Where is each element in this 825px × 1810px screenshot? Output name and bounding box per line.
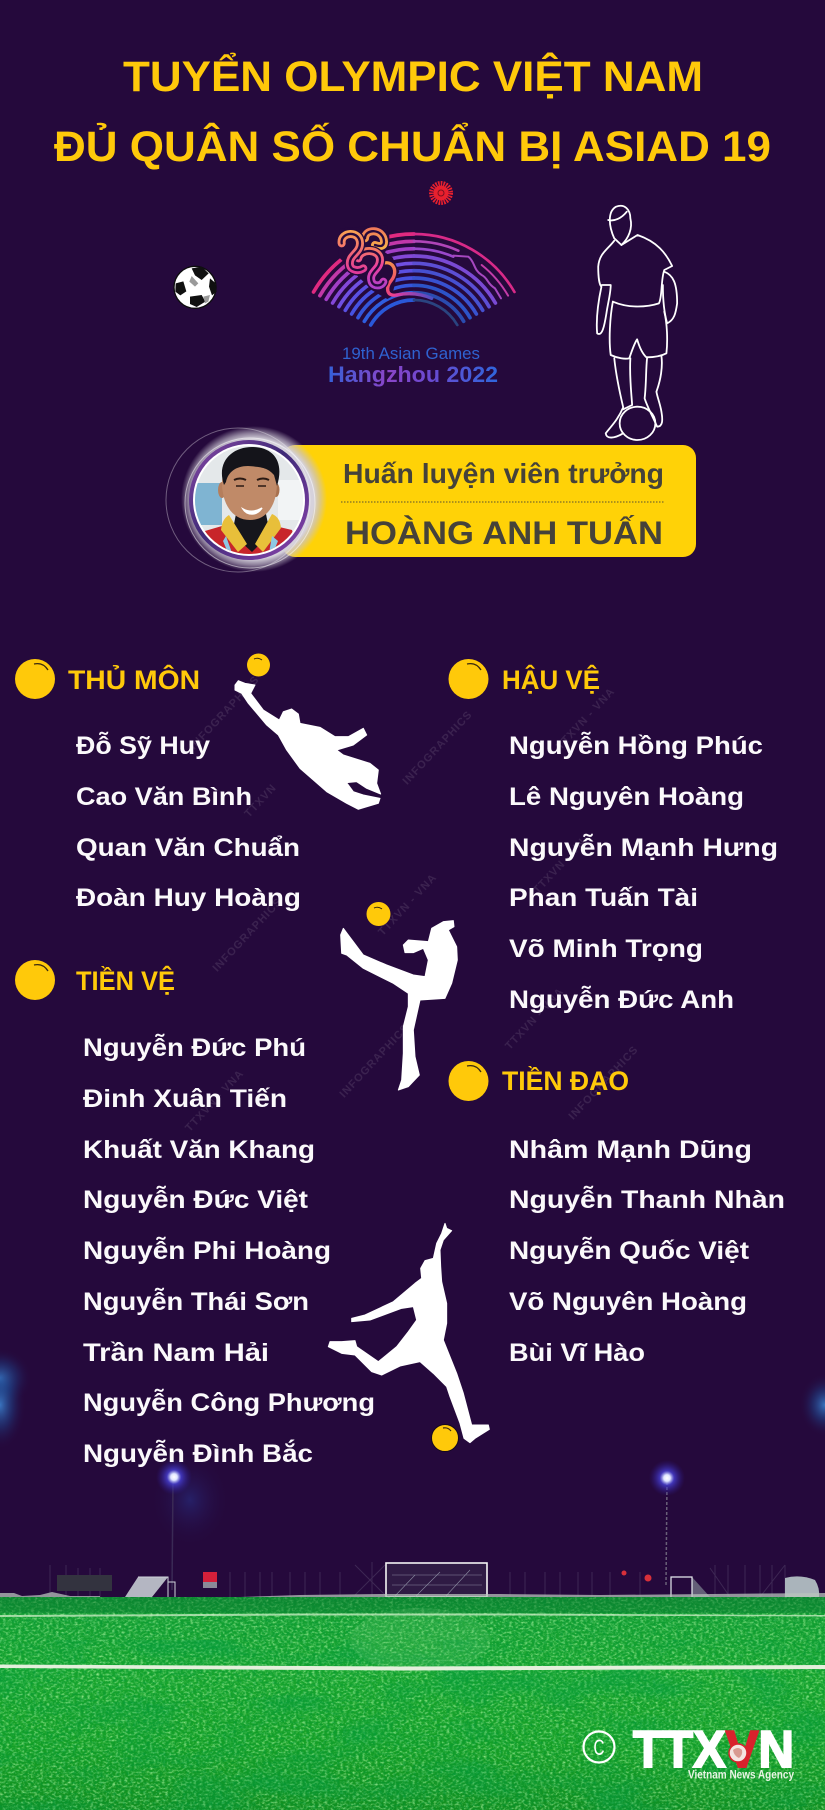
panel: defenders bbox=[448, 659, 778, 1014]
logo city: Hangzhou 2022 bbox=[328, 362, 498, 387]
squiggle emblem bbox=[338, 225, 432, 299]
yellow name plate bbox=[282, 445, 696, 557]
concentric arcs bbox=[314, 234, 514, 325]
panel: midfielders bbox=[15, 960, 375, 1468]
watermarks: INFOGRAPHICS bbox=[188, 674, 262, 752]
player list: Nguyễn Thanh Nhàn bbox=[509, 1184, 785, 1214]
icon: yellow ball bbox=[15, 960, 55, 1000]
horizon debris bbox=[0, 1592, 825, 1597]
watermarks: TTXVN - VNA bbox=[503, 986, 566, 1052]
player list: Quan Văn Chuẩn bbox=[76, 834, 300, 862]
player list: Nguyễn Thái Sơn bbox=[83, 1286, 309, 1316]
small goal right bbox=[671, 1577, 710, 1597]
small goal left bbox=[125, 1577, 175, 1597]
watermarks bbox=[183, 674, 641, 1134]
player list: Nguyễn Phi Hoàng bbox=[83, 1235, 331, 1265]
globe emblem bbox=[729, 1744, 747, 1762]
player list: Nguyễn Đức Phú bbox=[83, 1032, 306, 1062]
player list bbox=[76, 730, 301, 912]
main goal bbox=[386, 1563, 487, 1597]
watermarks: INFOGRAPHICS bbox=[567, 1044, 641, 1122]
silhouette: goalkeeper diving bbox=[235, 654, 381, 809]
heading: HẬU VỆ bbox=[502, 664, 600, 695]
icon: yellow ball bbox=[15, 659, 55, 699]
watermarks: TTXVN - VNA bbox=[554, 686, 617, 752]
floodlight left bbox=[150, 1452, 230, 1590]
player list: Khuất Văn Khang bbox=[83, 1136, 315, 1164]
panel: goalkeepers bbox=[15, 659, 301, 912]
copyright mark bbox=[584, 1732, 614, 1762]
icon: outlined player bbox=[597, 206, 677, 440]
player list: Võ Minh Trọng bbox=[509, 935, 703, 963]
icon: yellow ball bbox=[448, 1061, 488, 1101]
player list: Nguyễn Hồng Phúc bbox=[509, 730, 763, 760]
watermarks: TTXVN - VNA bbox=[531, 830, 594, 896]
watermarks: TTXVN - VNA bbox=[376, 872, 439, 938]
silhouette: high kick player bbox=[341, 902, 457, 1090]
red sign bbox=[203, 1570, 652, 1588]
field bbox=[0, 1597, 825, 1810]
player list: Nguyễn Quốc Việt bbox=[509, 1235, 750, 1265]
dugout bbox=[785, 1576, 819, 1597]
agency logo bbox=[584, 1721, 795, 1782]
title: ĐỦ QUÂN SỐ CHUẨN BỊ ASIAD 19 bbox=[54, 122, 771, 171]
player list: Bùi Vĩ Hào bbox=[509, 1339, 645, 1367]
copyright mark: C bbox=[594, 1735, 605, 1760]
player list bbox=[509, 730, 778, 1014]
title: TUYỂN OLYMPIC VIỆT NAM bbox=[123, 52, 703, 101]
corner floodlight glows bbox=[0, 1348, 825, 1450]
heading: THỦ MÔN bbox=[68, 663, 200, 695]
coach role: Huấn luyện viên trưởng bbox=[343, 458, 664, 489]
player list: Trần Nam Hải bbox=[83, 1339, 269, 1367]
player list: Phan Tuấn Tài bbox=[509, 884, 698, 912]
heading: TIỀN ĐẠO bbox=[502, 1065, 629, 1096]
player list: Đoàn Huy Hoàng bbox=[76, 884, 301, 912]
icon: red sun emblem bbox=[432, 184, 450, 202]
player list: Nguyễn Mạnh Hưng bbox=[509, 832, 778, 862]
ball bbox=[432, 1424, 458, 1452]
watermarks: INFOGRAPHICS bbox=[401, 709, 475, 787]
icon: yellow ball bbox=[448, 659, 488, 699]
player list: Nguyễn Đức Anh bbox=[509, 984, 734, 1014]
player list: Nguyễn Công Phương bbox=[83, 1387, 375, 1417]
floodlight right bbox=[649, 1460, 685, 1585]
panel: forwards bbox=[448, 1061, 785, 1367]
watermarks: INFOGRAPHICS bbox=[338, 1022, 412, 1100]
player list: Võ Nguyên Hoàng bbox=[509, 1288, 747, 1316]
coach name: HOÀNG ANH TUẤN bbox=[345, 515, 663, 551]
watermarks: INFOGRAPHICS bbox=[211, 896, 285, 974]
player list: Nhâm Mạnh Dũng bbox=[509, 1136, 752, 1164]
coach portrait bbox=[166, 426, 327, 572]
billboard bbox=[57, 1575, 112, 1591]
logo caption: 19th Asian Games bbox=[342, 344, 480, 363]
ball bbox=[247, 654, 270, 676]
title bbox=[54, 52, 771, 171]
watermarks: TTXVN - VNA bbox=[183, 1068, 246, 1134]
tagline: Vietnam News Agency bbox=[688, 1770, 795, 1782]
watermarks: TTXVN bbox=[242, 782, 279, 820]
coach card bbox=[166, 426, 696, 572]
stadium background bbox=[0, 1348, 825, 1810]
icon: football bbox=[174, 266, 217, 308]
ball bbox=[366, 902, 390, 926]
Asian Games logo bbox=[314, 225, 514, 387]
player list: Cao Văn Bình bbox=[76, 783, 252, 811]
silhouette: striker bbox=[328, 1223, 489, 1452]
player list: Nguyễn Đình Bắc bbox=[83, 1438, 313, 1468]
heading: TIỀN VỆ bbox=[76, 965, 175, 996]
player list: Nguyễn Đức Việt bbox=[83, 1184, 309, 1214]
player list: Đỗ Sỹ Huy bbox=[76, 730, 210, 760]
fence bbox=[50, 1562, 785, 1597]
wordmark: TTXVN bbox=[633, 1721, 794, 1779]
player list bbox=[509, 1136, 785, 1367]
player list: Đinh Xuân Tiến bbox=[83, 1085, 287, 1113]
player list bbox=[83, 1032, 375, 1468]
player list: Lê Nguyên Hoàng bbox=[509, 783, 744, 811]
